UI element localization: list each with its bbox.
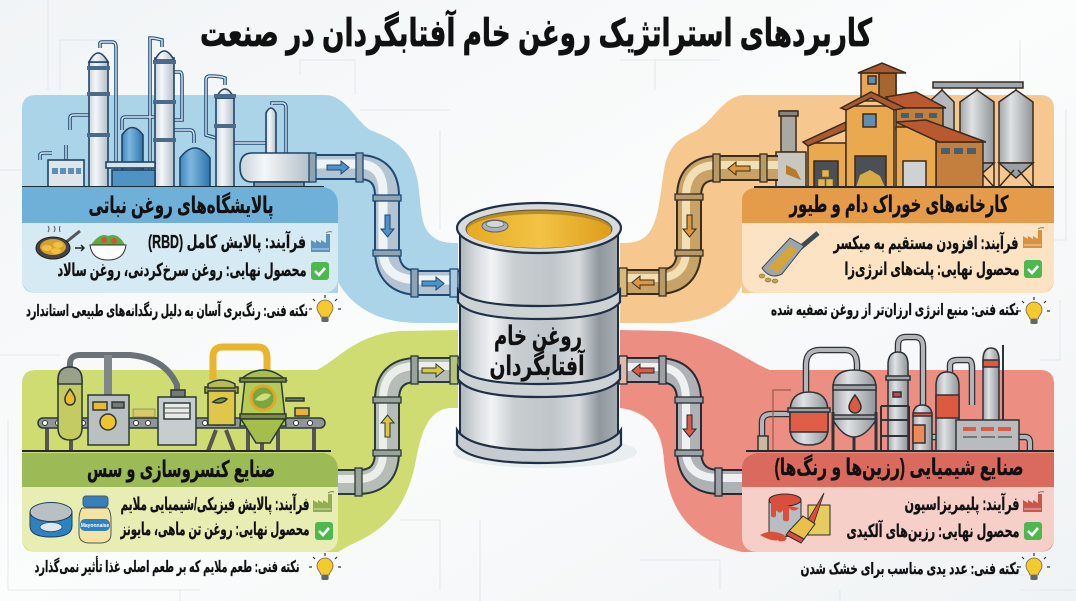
heading xyxy=(22,187,338,223)
barrel label xyxy=(490,321,585,382)
ground lines xyxy=(22,187,1054,451)
process text: فرآیند: پالایش کامل (RBD) xyxy=(148,230,306,253)
pipe: red xyxy=(616,356,745,496)
panel: canning and sauce: صنایع کنسروسازی و سس xyxy=(87,456,275,483)
icon: mayonnaise jar: Mayonnaise xyxy=(81,523,110,529)
icon: check xyxy=(1024,522,1042,540)
scene: chemical plant xyxy=(758,337,1030,451)
scene: vegetable oil refinery xyxy=(40,38,310,187)
process text: فرآیند: پالایش فیزیکی/شیمیایی ملایم xyxy=(120,492,310,515)
icon: factory xyxy=(1023,492,1044,512)
icon: factory xyxy=(311,232,332,252)
icon: check xyxy=(315,522,333,540)
heading xyxy=(22,453,338,487)
panel: canning and sauce xyxy=(22,453,338,552)
barrel label: آفتابگردان xyxy=(490,349,585,382)
heading xyxy=(742,188,1054,223)
product text: محصول نهایی: روغن تن ماهی، مایونز xyxy=(120,519,310,540)
icon: mayonnaise jar xyxy=(79,496,111,543)
heading xyxy=(742,453,1054,487)
icon: factory xyxy=(313,492,334,512)
product text: محصول نهایی: روغن سرخ‌کردنی، روغن سالاد xyxy=(58,260,306,281)
panel: red background shape xyxy=(620,330,1054,552)
icon: feed scoop xyxy=(759,233,818,283)
note: blue xyxy=(26,295,341,322)
pipe: blue xyxy=(309,153,462,297)
silos xyxy=(929,82,1033,187)
panel: chemical industries xyxy=(742,453,1054,552)
icon: factory xyxy=(1023,228,1044,248)
note: red xyxy=(800,553,1050,580)
pipe: green xyxy=(336,356,462,496)
barrel label: روغن خام xyxy=(494,321,582,352)
icon: tuna can xyxy=(30,502,72,537)
barrel: crude sunflower oil xyxy=(453,203,637,468)
icon: check xyxy=(311,262,329,280)
panel: blue background shape xyxy=(22,95,458,323)
panel: vegetable oil refineries: پالایشگاه‌های روغن نباتی xyxy=(88,192,274,219)
note: orange xyxy=(771,297,1050,324)
icon: paint can and brush xyxy=(760,493,830,543)
scene: canning and sauce line xyxy=(38,347,325,451)
scene: animal feed factory xyxy=(776,63,1033,187)
panel: green background shape xyxy=(22,330,458,552)
pipe: orange xyxy=(616,154,778,296)
note: blue: نکته فنی: رنگ‌بری آسان به دلیل رنگدانه‌های طبیعی استاندارد xyxy=(26,300,308,320)
panel: animal feed factories xyxy=(742,188,1054,293)
panel: orange background shape xyxy=(620,95,1054,323)
panel: vegetable oil refineries xyxy=(22,187,338,293)
note: green xyxy=(34,553,341,580)
icon: check xyxy=(1024,260,1042,278)
note: green: نکته فنی: طعم ملایم که بر طعم اصلی غذا تأثیر نمی‌گذارد xyxy=(34,556,300,576)
icon: frying pan and salad xyxy=(36,226,126,260)
